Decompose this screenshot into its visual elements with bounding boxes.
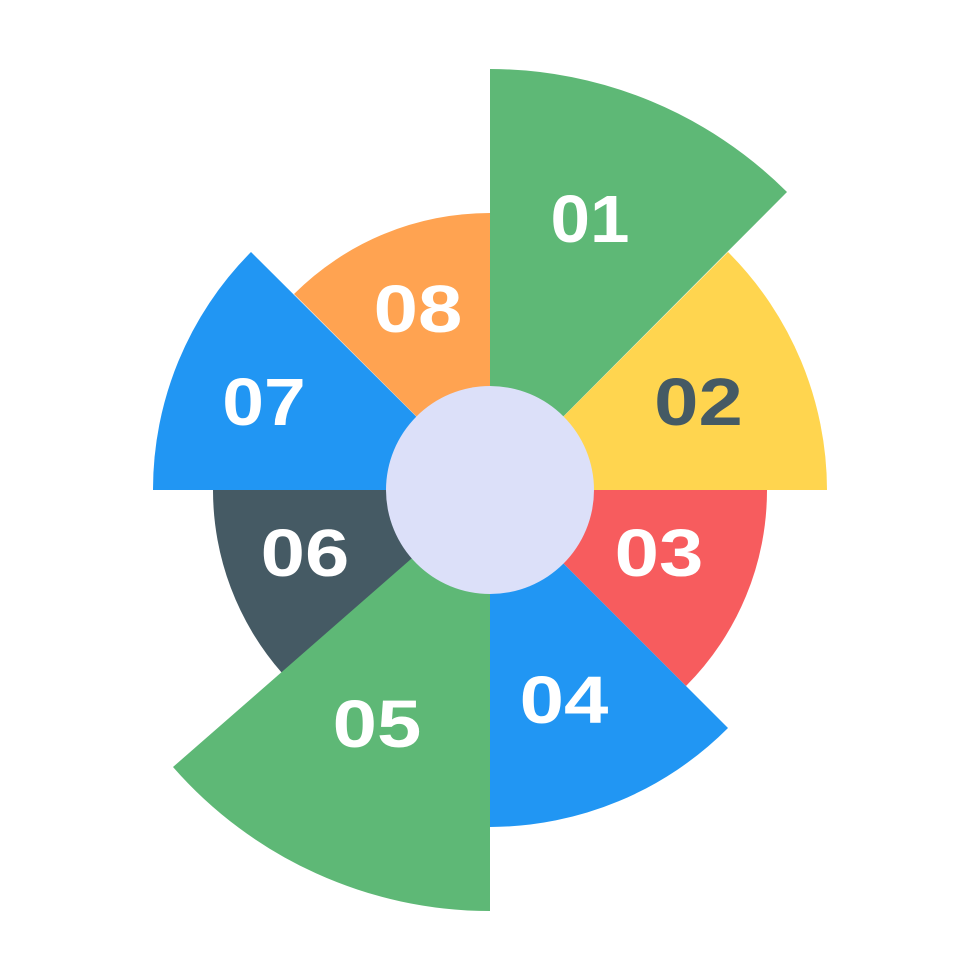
segment 04: blue: [490, 490, 728, 827]
segment 06: dark slate: [213, 490, 490, 673]
segment 07: blue: [153, 252, 490, 490]
center circle: [386, 386, 594, 594]
segment 01: green: 01: [551, 182, 629, 257]
segment 05: green: 05: [333, 686, 421, 762]
segment 03: red: [490, 490, 767, 686]
segment 05: green: [173, 490, 490, 911]
segment 08: orange: 08: [374, 271, 462, 347]
segment 02: yellow: 02: [654, 364, 743, 440]
segment 08: orange: [294, 213, 490, 490]
segment 02: yellow: [490, 252, 827, 490]
segment 06: dark slate: 06: [261, 515, 349, 591]
segment 03: red: 03: [615, 515, 703, 591]
segment 07: blue: 07: [222, 366, 306, 440]
segment 01: green: [490, 69, 787, 490]
segment 04: blue: 04: [520, 662, 608, 738]
